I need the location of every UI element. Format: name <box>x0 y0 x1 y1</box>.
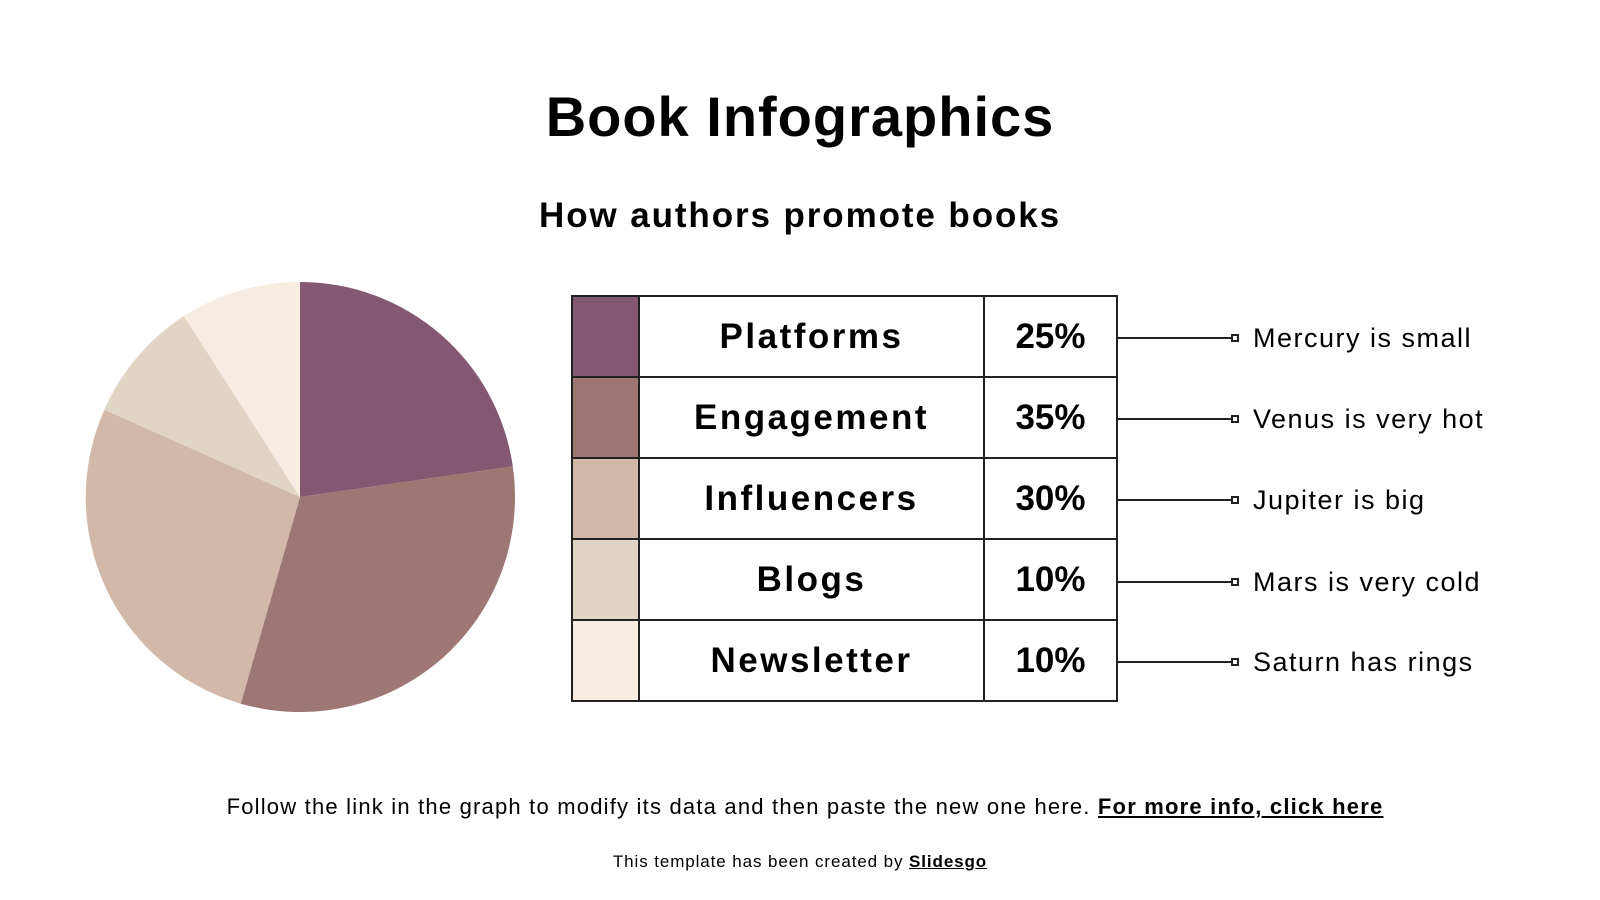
pie chart <box>86 282 515 712</box>
subtitle: How authors promote books <box>539 196 1061 235</box>
slice: Blogs <box>104 316 300 497</box>
credit: This template has been created by Slidesgo <box>613 852 987 871</box>
data table: 25% <box>1015 316 1086 356</box>
slice: Influencers <box>86 410 300 704</box>
label: Jupiter: Jupiter is big <box>1253 485 1426 515</box>
data table: Newsletter <box>710 640 913 680</box>
data table: Engagement <box>694 398 929 436</box>
data table <box>571 295 1118 702</box>
data table: 30% <box>1015 478 1086 518</box>
label: Mercury: Mercury is small <box>1253 323 1472 353</box>
data table: 10% <box>1015 560 1086 598</box>
footer note: Follow the link in the graph to modify its data and then paste the new one here. For more info, click here <box>227 794 1383 819</box>
connector lines <box>1118 334 1239 666</box>
slice: Platforms <box>300 282 513 497</box>
label: Saturn: Saturn has rings <box>1253 647 1474 677</box>
data table: Platforms <box>720 316 903 356</box>
title: Book Infographics <box>546 85 1054 148</box>
slice: Newsletter <box>184 282 300 497</box>
label: Mars: Mars is very cold <box>1253 567 1481 597</box>
data table: 35% <box>1015 398 1086 436</box>
slice: Engagement <box>241 466 515 712</box>
data table: 10% <box>1015 640 1086 680</box>
data table: Blogs <box>757 560 866 598</box>
label: Venus: Venus is very hot <box>1253 404 1484 434</box>
data table: Influencers <box>704 478 919 518</box>
